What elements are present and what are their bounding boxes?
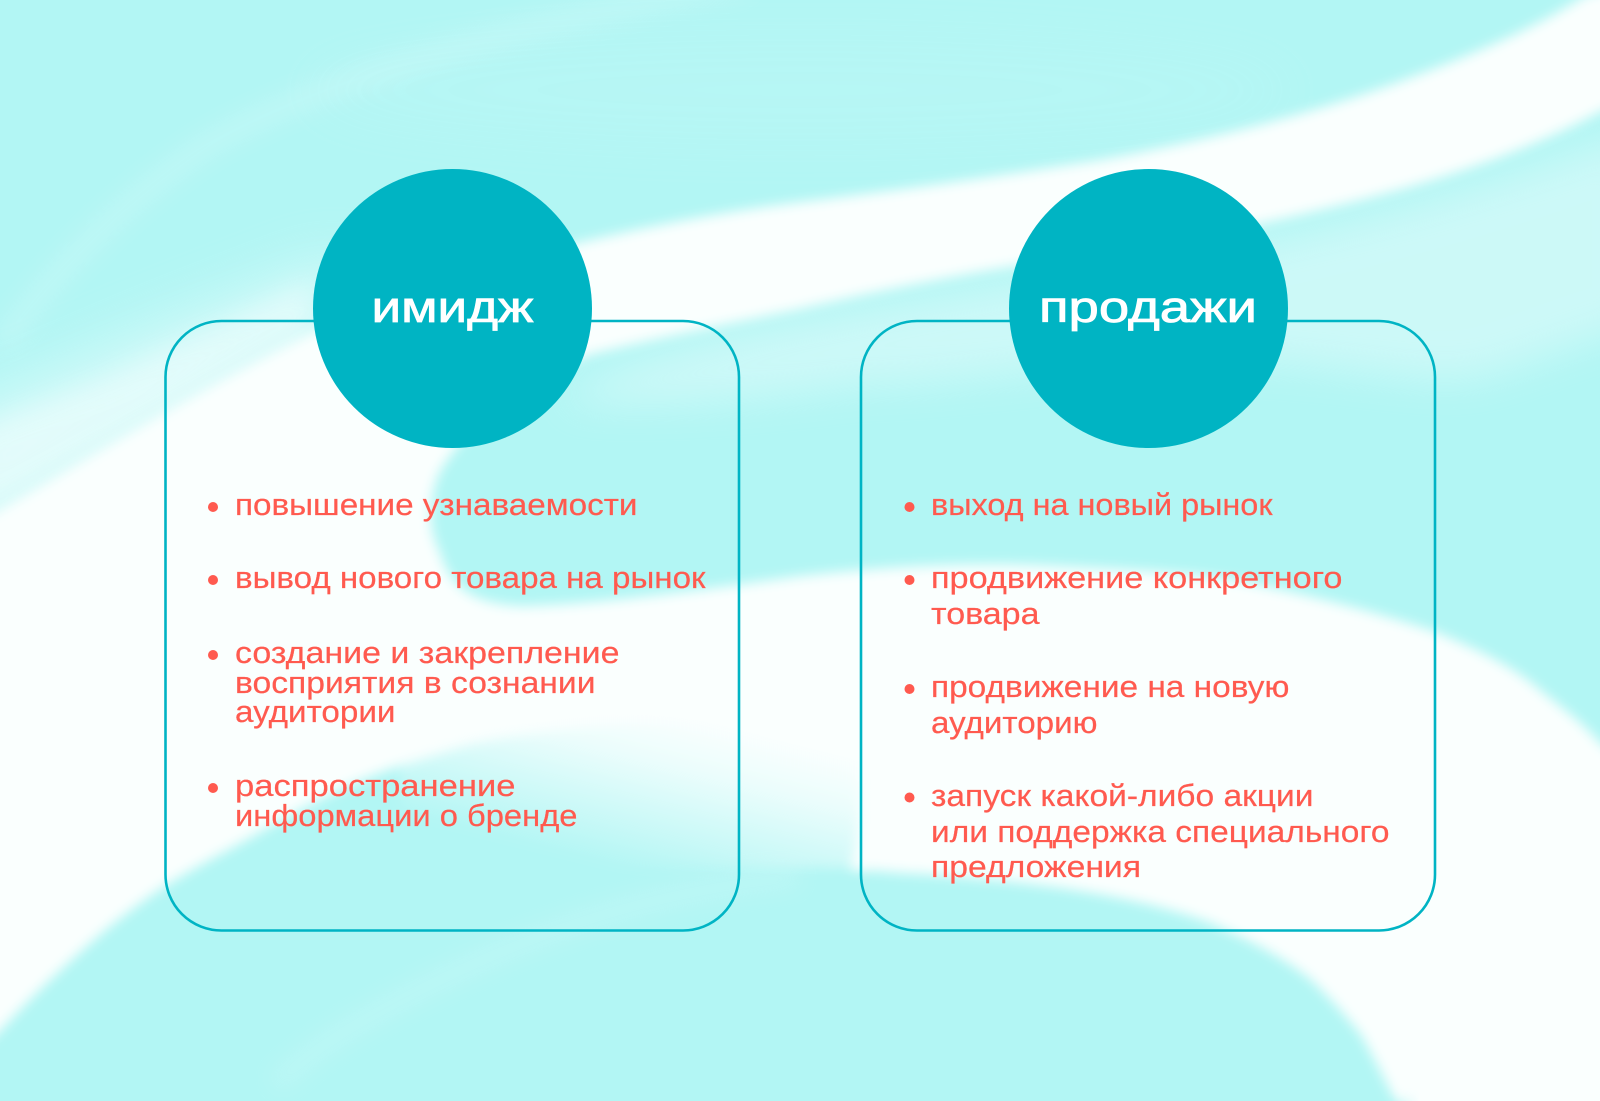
bullet list: имидж: информации о бренде <box>235 798 578 833</box>
bullet list: продажи: товара <box>931 596 1040 631</box>
bullet list: имидж <box>208 487 706 833</box>
bullet list: продажи: продвижение конкретного <box>931 560 1342 595</box>
heading circle: продажи <box>1009 169 1288 448</box>
bullet list: продажи: выход на новый рынок <box>931 487 1273 522</box>
panel outline <box>861 321 1435 930</box>
bullet list: имидж: распространение <box>235 768 516 803</box>
bullet list: продажи: продвижение на новую <box>931 669 1290 704</box>
panel outline <box>166 321 739 930</box>
heading circle: имидж <box>313 169 592 448</box>
bullet list: имидж: вывод нового товара на рынок <box>235 560 706 595</box>
bullet list: имидж: аудитории <box>235 694 396 729</box>
bullet list: продажи: запуск какой-либо акции <box>931 778 1314 813</box>
bullet list: продажи: или поддержка специального <box>931 814 1390 849</box>
heading circle: имидж: имидж <box>372 283 534 332</box>
panel: имидж <box>166 169 739 930</box>
bullet list: продажи <box>904 487 1390 884</box>
panel: продажи <box>861 169 1435 930</box>
bullet list: имидж: восприятия в сознании <box>235 665 596 700</box>
bullet list: продажи: аудиторию <box>931 705 1098 740</box>
bullet list: продажи: предложения <box>931 849 1141 884</box>
heading circle: продажи: продажи <box>1039 283 1257 332</box>
bullet list: имидж: создание и закрепление <box>235 635 620 670</box>
bullet list: имидж: повышение узнаваемости <box>235 487 638 522</box>
